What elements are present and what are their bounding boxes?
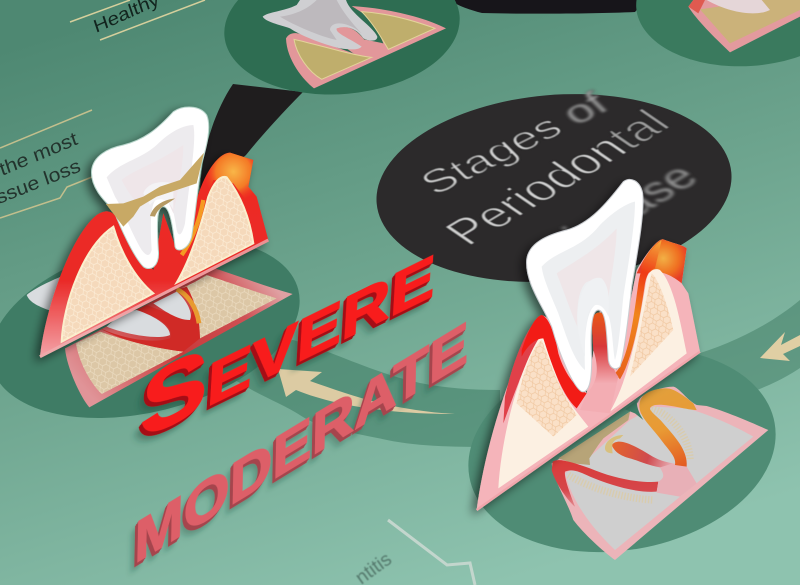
title word: Stages: Stages: [412, 108, 571, 202]
top right tooth on flat circle: [688, 0, 800, 52]
stage circle: severe: [0, 208, 319, 448]
cut edge: [40, 240, 268, 357]
cut edge: [477, 352, 700, 510]
tartar curl: [150, 198, 175, 217]
red gum: [522, 315, 587, 408]
red gum stripe: [552, 460, 658, 507]
text snippet: healthy: [70, 0, 218, 40]
notch gum: [580, 312, 618, 413]
tooth dentin: [280, 0, 362, 40]
upper root: [612, 442, 673, 467]
gum: [688, 0, 800, 52]
flat tooth gray crown: [27, 275, 65, 311]
side darker strip: [503, 317, 542, 423]
green gap: [625, 401, 643, 420]
stage circle: healthy top: [219, 0, 465, 104]
bone stipple: [568, 408, 690, 500]
moderate flat tooth: [552, 387, 768, 560]
centre pink: [657, 463, 697, 497]
tooth enamel: [92, 107, 209, 269]
centre title disc: [369, 80, 739, 296]
tartar: [558, 412, 630, 465]
gum peak glow: [637, 239, 687, 283]
red gum tip: [688, 0, 705, 13]
gum: [286, 6, 446, 88]
bone: [700, 0, 800, 43]
connector band: right side: [690, 300, 800, 420]
moderate upright tooth: [477, 179, 700, 510]
bone right: [177, 177, 253, 283]
flat tooth root 2: [153, 292, 191, 320]
gum: [40, 153, 268, 357]
pulp: [557, 228, 617, 327]
stage circle: moderate: [452, 325, 792, 575]
severe flat tooth: [27, 267, 293, 407]
text snippet: periodontitis: [352, 520, 475, 585]
healthy tooth on flat circle: [263, 0, 446, 88]
stage circle: top right: [632, 0, 800, 74]
label: SEVERE: SEVERE: [138, 214, 439, 459]
arrow: moderate to severe: [278, 369, 455, 414]
small curl: [605, 435, 623, 453]
black connector: top stage to centre: [200, 84, 303, 195]
bone left: [62, 227, 153, 342]
gum: [477, 239, 700, 510]
connector band: moderate to severe: [200, 340, 500, 447]
black connector: top right: [450, 0, 645, 14]
dentin: [107, 125, 194, 255]
S curve gum: [639, 388, 697, 467]
text snippet: severe description: [0, 110, 92, 218]
title word: of: of: [553, 85, 617, 132]
orange inner stripe: [182, 200, 203, 255]
flat gum: [552, 387, 768, 560]
label: MODERATE: MODERATE: [134, 308, 469, 577]
bone left: [294, 39, 372, 79]
dentin: [542, 202, 635, 370]
severe upright tooth: [40, 107, 268, 357]
flat bone left: [76, 332, 183, 394]
flat tooth root 1: [107, 310, 170, 337]
severe bottom zigzag: [0, 177, 92, 218]
orange infection: [177, 153, 258, 253]
flat bone gray: [565, 407, 753, 550]
healthy lines: [70, 0, 205, 40]
flat bone right: [182, 275, 277, 338]
title word: Periodontal: Periodontal: [434, 102, 680, 253]
tartar band: [106, 153, 204, 227]
bone left: [498, 337, 588, 488]
tooth enamel: [527, 179, 643, 392]
flat gum: [65, 267, 293, 407]
pulp: [122, 145, 183, 213]
arrow: right side: [760, 332, 800, 361]
title word: Disease: Disease: [524, 156, 708, 272]
severe top line: [0, 110, 92, 148]
periodontitis zigzag: [388, 520, 475, 585]
pulp centre: [143, 182, 173, 210]
notch gum: [335, 27, 383, 53]
bone right: [362, 12, 435, 49]
tooth: [263, 0, 377, 49]
tooth: [707, 0, 770, 13]
flat root area: [100, 287, 200, 352]
flat orange stripe: [177, 289, 199, 323]
bone right: [610, 269, 687, 412]
title: Stages of Periodontal Disease: [412, 85, 708, 272]
pulp centre: [577, 278, 609, 357]
orange gum stripe: [615, 240, 662, 379]
